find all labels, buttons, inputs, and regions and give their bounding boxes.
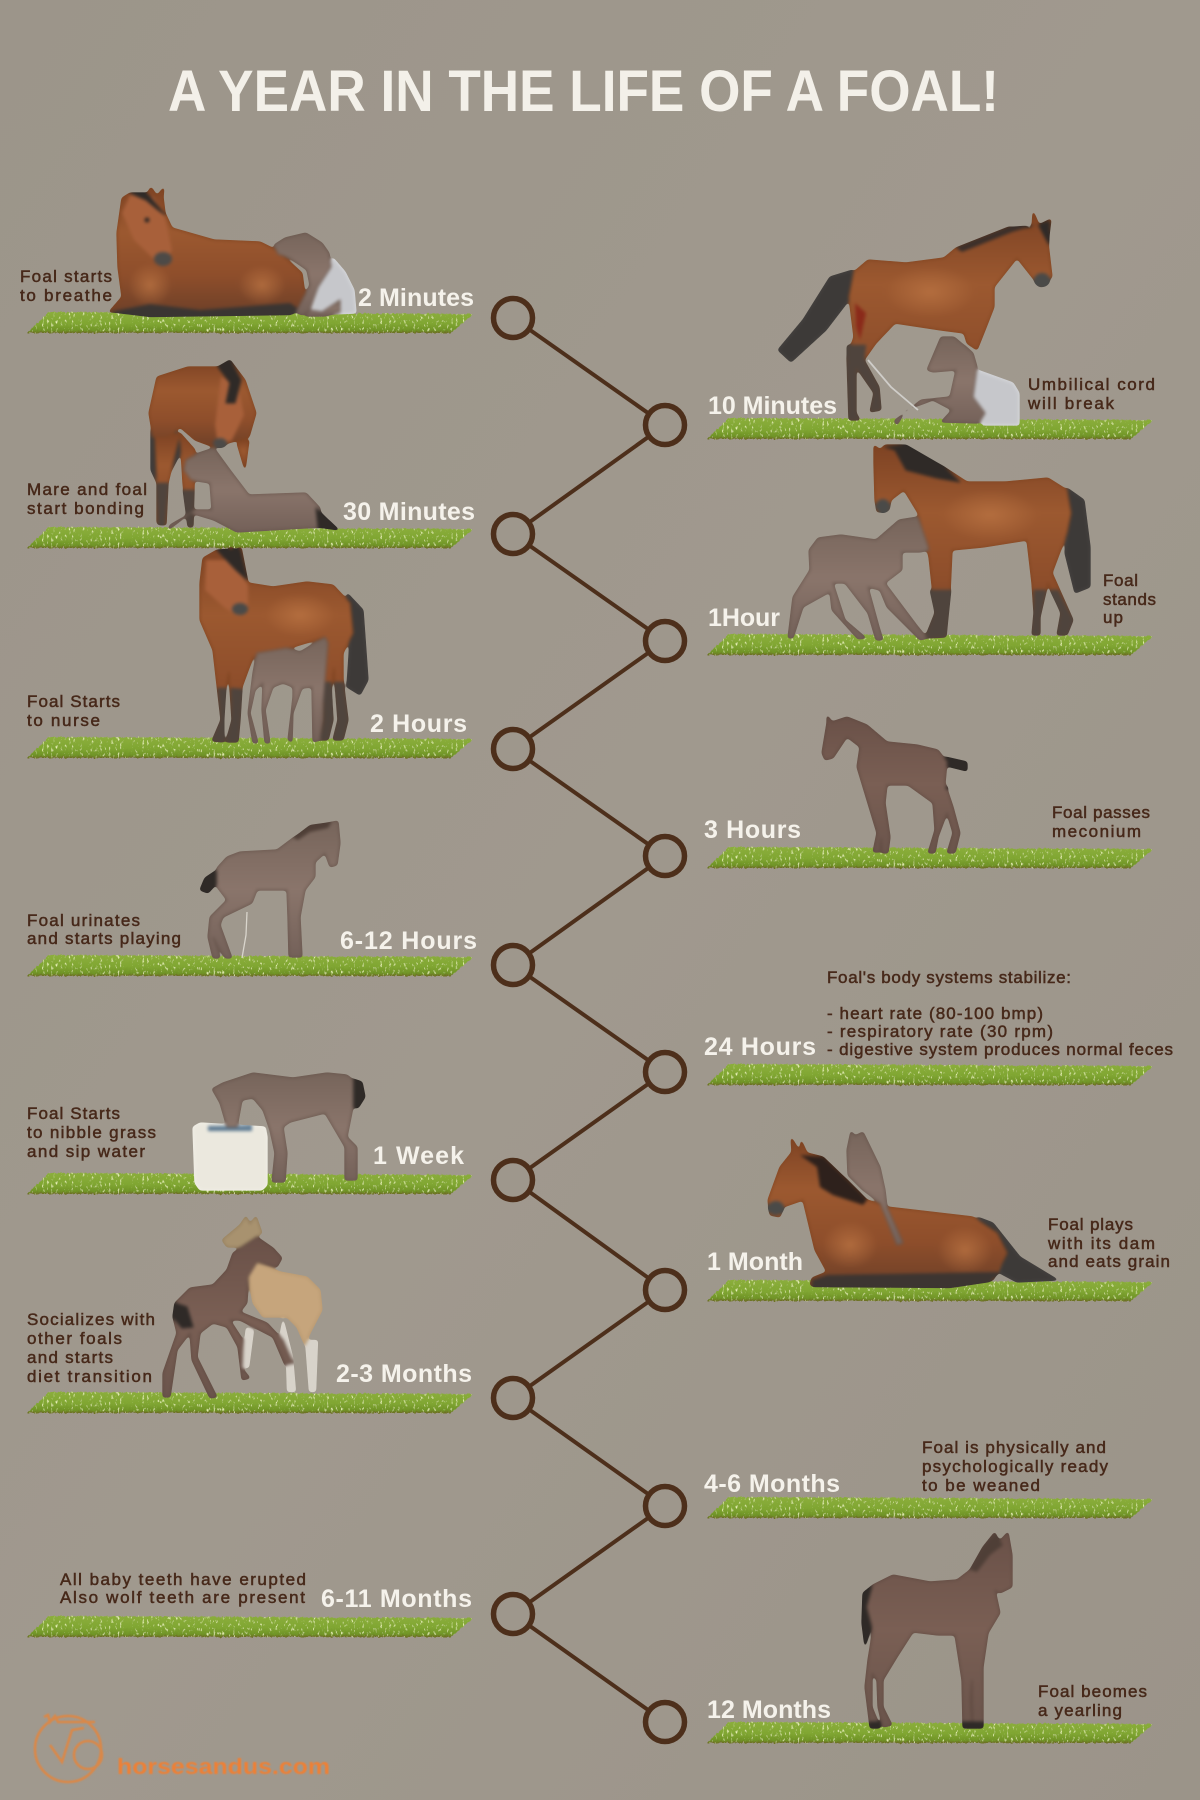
panel: 30 Minutes bbox=[27, 360, 475, 548]
description: Foal beomes bbox=[1038, 1682, 1147, 1701]
description bbox=[827, 968, 1173, 1059]
description bbox=[60, 1570, 306, 1607]
panel: 6-12 Hours bbox=[27, 821, 477, 976]
panel: 12 Months bbox=[707, 1532, 1153, 1743]
description: to nibble grass bbox=[27, 1123, 156, 1142]
description: Foal urinates bbox=[27, 911, 140, 930]
description: and sip water bbox=[27, 1142, 145, 1161]
description: to be weaned bbox=[922, 1476, 1040, 1495]
description: Foal Starts bbox=[27, 1104, 120, 1123]
grass strip bbox=[27, 737, 473, 758]
description bbox=[27, 480, 147, 518]
panel: 6-11 Months bbox=[27, 1570, 473, 1637]
illustration: mare standing with newborn foal bbox=[778, 211, 1052, 425]
panel: 10 Minutes bbox=[707, 211, 1155, 439]
timeline connector bbox=[494, 298, 684, 1742]
grass strip bbox=[707, 1280, 1153, 1301]
time label: 2 Minutes bbox=[358, 284, 474, 312]
description: other foals bbox=[27, 1329, 122, 1348]
panel: 1 Hour bbox=[707, 445, 1156, 655]
description: Foal starts bbox=[20, 267, 112, 286]
illustration: foal passing meconium bbox=[822, 715, 967, 853]
description bbox=[922, 1438, 1108, 1495]
logo: horsesandus.com bbox=[35, 1715, 330, 1782]
time label: 24 Hours bbox=[704, 1033, 816, 1061]
panel: 2 Hours bbox=[27, 546, 473, 758]
title: A YEAR IN THE LIFE OF A FOAL! bbox=[168, 59, 999, 124]
grass strip bbox=[707, 418, 1153, 439]
grass strip bbox=[27, 1392, 473, 1413]
description: - heart rate (80-100 bmp) bbox=[827, 1004, 1043, 1023]
description: Foal is physically and bbox=[922, 1438, 1106, 1457]
time label: 1Hour bbox=[708, 604, 780, 632]
brand text: horsesandus.com bbox=[117, 1754, 330, 1779]
time label: 2 Hours bbox=[370, 710, 467, 738]
description bbox=[1052, 803, 1150, 841]
time label: 2-3 Months bbox=[336, 1360, 472, 1388]
description bbox=[1103, 571, 1156, 627]
description: All baby teeth have erupted bbox=[60, 1570, 306, 1589]
panel: 1 Week bbox=[27, 1073, 473, 1194]
illustration: foal stands beside mare bbox=[788, 445, 1090, 640]
panel: 4-6 Months bbox=[704, 1438, 1153, 1518]
illustration: mare lying with newborn foal bbox=[109, 187, 356, 317]
illustration: yearling bbox=[862, 1532, 1012, 1728]
grass strip bbox=[707, 1722, 1153, 1743]
time label: 30 Minutes bbox=[343, 498, 475, 526]
grass strip bbox=[707, 634, 1153, 655]
time label: 1 Week bbox=[373, 1142, 464, 1170]
time label: 6-12 Hours bbox=[340, 927, 477, 955]
description bbox=[27, 1310, 155, 1386]
description: Foal's body systems stabilize: bbox=[827, 968, 1071, 987]
description: - digestive system produces normal feces bbox=[827, 1040, 1173, 1059]
description: with its dam bbox=[1047, 1234, 1155, 1253]
illustration: foal drinking from water tub bbox=[193, 1073, 365, 1190]
description: Foal bbox=[1103, 571, 1138, 590]
grass strip bbox=[707, 847, 1153, 868]
illustration: mare and foal bonding bbox=[149, 360, 339, 532]
description: Foal Starts bbox=[27, 692, 120, 711]
panel: 1 Month bbox=[707, 1131, 1170, 1301]
description bbox=[20, 267, 112, 305]
description: psychologically ready bbox=[922, 1457, 1108, 1476]
time label: 6-11 Months bbox=[321, 1585, 472, 1613]
description: Socializes with bbox=[27, 1310, 155, 1329]
description: will break bbox=[1027, 394, 1114, 413]
description: stands bbox=[1103, 590, 1156, 609]
description: a yearling bbox=[1038, 1701, 1122, 1720]
description: and eats grain bbox=[1048, 1252, 1170, 1271]
description: and starts bbox=[27, 1348, 113, 1367]
description: start bonding bbox=[27, 499, 144, 518]
description: - respiratory rate (30 rpm) bbox=[827, 1022, 1053, 1041]
time label: 4-6 Months bbox=[704, 1470, 840, 1498]
description bbox=[27, 1104, 156, 1161]
time label: 3 Hours bbox=[704, 816, 801, 844]
description: to nurse bbox=[27, 711, 100, 730]
grass strip bbox=[27, 312, 473, 333]
time label: 12 Months bbox=[707, 1696, 831, 1724]
description: meconium bbox=[1052, 822, 1141, 841]
illustration: foal plays with resting dam bbox=[768, 1131, 1058, 1288]
description bbox=[27, 692, 120, 730]
grass strip bbox=[707, 1497, 1153, 1518]
grass strip bbox=[27, 1173, 473, 1194]
time label: 10 Minutes bbox=[708, 392, 837, 420]
illustration: foal urinating bbox=[200, 821, 340, 958]
panel: 24 Hours bbox=[704, 968, 1173, 1085]
description: to breathe bbox=[20, 286, 112, 305]
description: diet transition bbox=[27, 1367, 152, 1386]
description: Foal passes bbox=[1052, 803, 1150, 822]
description: up bbox=[1103, 608, 1123, 627]
illustration: two foals playing bbox=[163, 1216, 322, 1398]
description: Also wolf teeth are present bbox=[60, 1588, 305, 1607]
description: and starts playing bbox=[27, 929, 181, 948]
grass strip bbox=[707, 1064, 1153, 1085]
grass strip bbox=[27, 1616, 473, 1637]
grass strip bbox=[27, 955, 473, 976]
grass strip bbox=[27, 527, 473, 548]
description: Umbilical cord bbox=[1028, 375, 1155, 394]
panel: 3 Hours bbox=[704, 715, 1153, 868]
icon: horse heart emblem bbox=[35, 1715, 102, 1782]
description bbox=[1038, 1682, 1147, 1720]
illustration: foal nursing bbox=[200, 546, 368, 743]
description bbox=[1027, 375, 1155, 413]
description: Foal plays bbox=[1048, 1215, 1133, 1234]
panel: 2 Minutes bbox=[20, 187, 474, 333]
description bbox=[1047, 1215, 1170, 1271]
description: Mare and foal bbox=[27, 480, 147, 499]
description bbox=[27, 911, 181, 948]
time label: 1 Month bbox=[707, 1248, 803, 1276]
panel: 2-3 Months bbox=[27, 1216, 473, 1413]
